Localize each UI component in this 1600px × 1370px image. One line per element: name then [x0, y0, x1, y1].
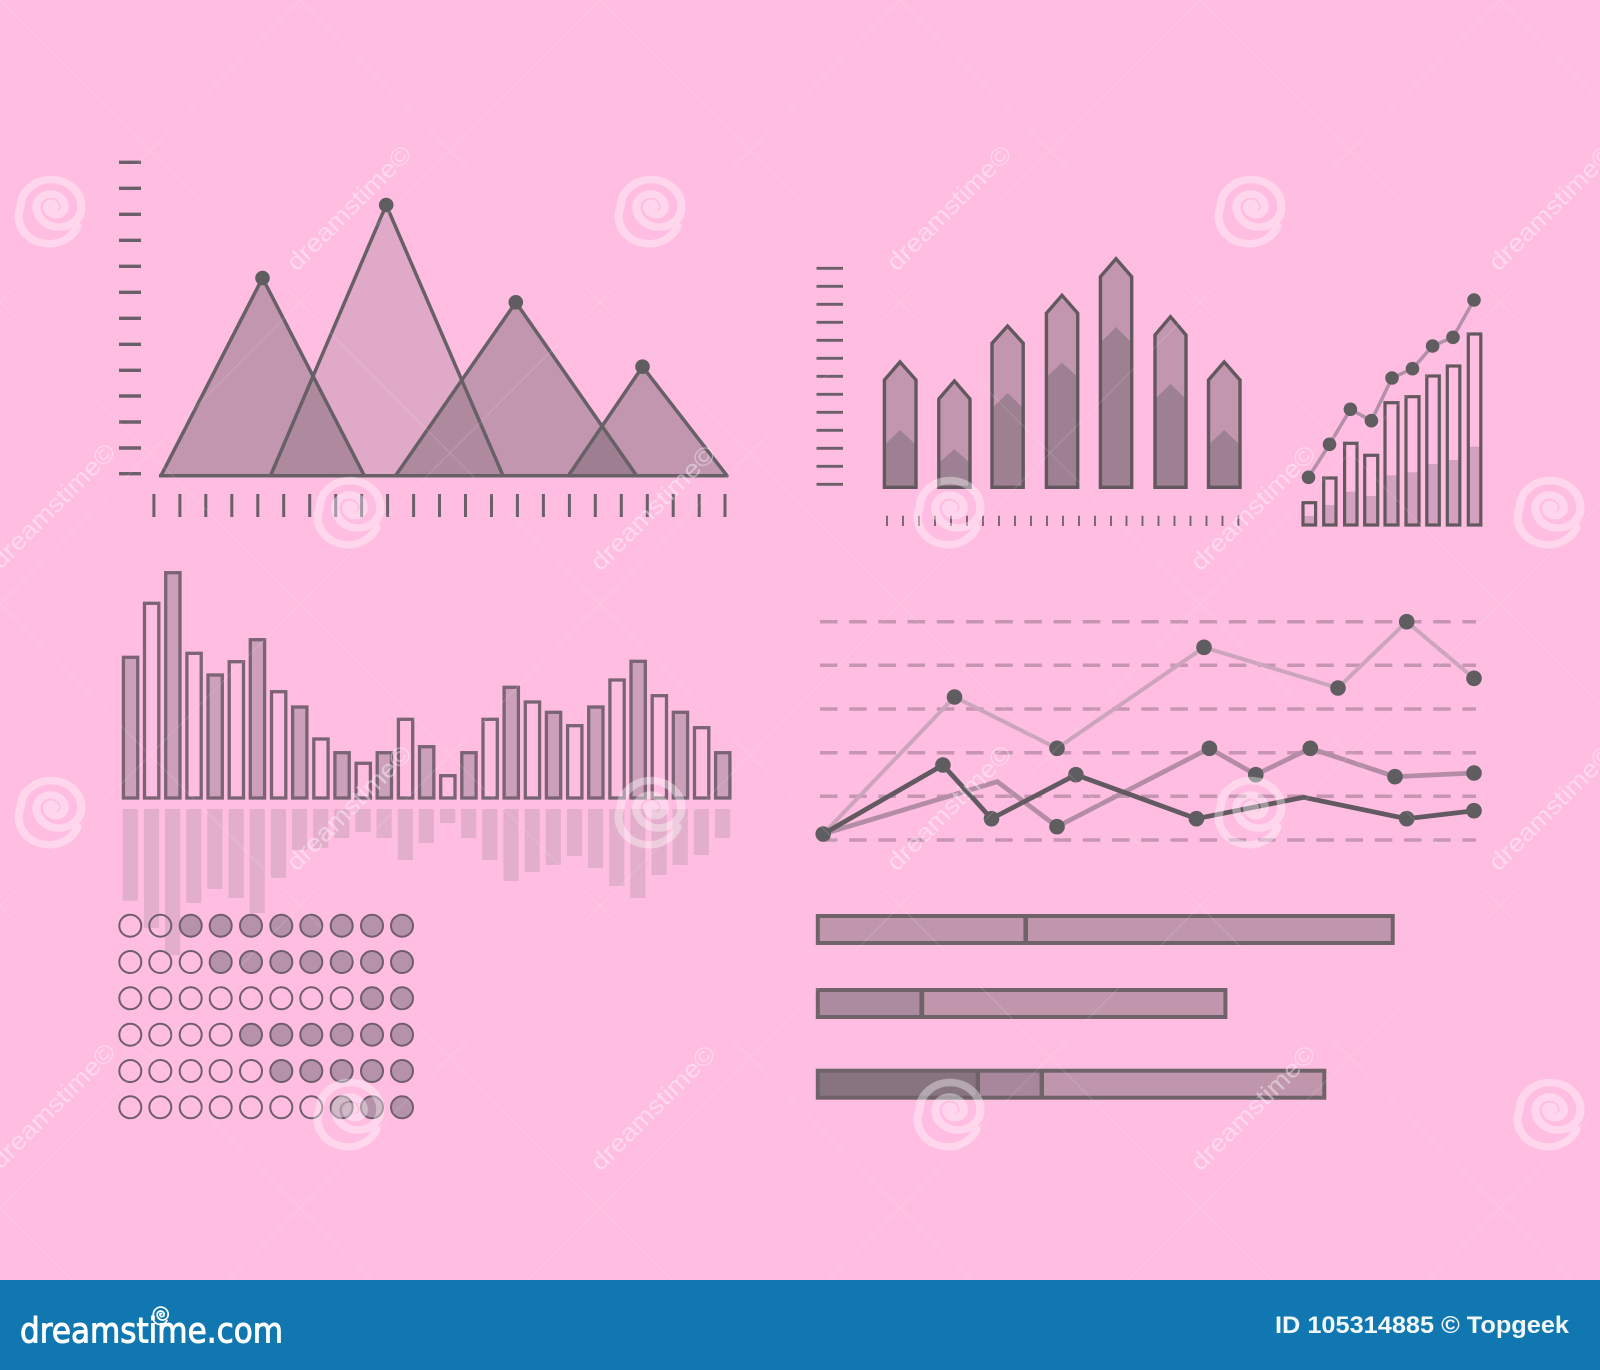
- bar inner fills: [1303, 447, 1481, 525]
- progress bar 2: [816, 988, 1227, 1019]
- footer id and credit: ID 105314885 © Topgeek: [1275, 1312, 1570, 1339]
- medium line: [823, 748, 1474, 834]
- watermark: text: dreamstime©: [1185, 440, 1322, 577]
- panel: multi-line chart: [815, 614, 1482, 842]
- footer logo spiral: [153, 1307, 168, 1325]
- footer logo text: dreamstime.com: [20, 1312, 283, 1352]
- watermark: text: dreamstime©: [281, 740, 418, 877]
- x axis ticks: [154, 494, 725, 517]
- x axis ticks: [887, 516, 1238, 526]
- panel: horizontal progress bars: [816, 914, 1395, 1100]
- panel: dot matrix: [119, 915, 413, 1118]
- y axis ticks: [119, 162, 141, 474]
- watermark: spirals: [19, 179, 1580, 1147]
- watermark: text: dreamstime©: [281, 140, 418, 277]
- triangles: [161, 205, 727, 476]
- watermark: text: dreamstime©: [585, 1040, 722, 1177]
- arrow bar 4: [1046, 295, 1078, 487]
- line dots: [815, 614, 1482, 842]
- footer bar: [0, 1280, 1600, 1370]
- trend line: [1308, 300, 1474, 477]
- panel: arrow bar chart: [816, 259, 1240, 526]
- watermark: text: dreamstime©: [1185, 1040, 1322, 1177]
- arrow bar 3: [992, 326, 1023, 487]
- panel: mountain triangle chart: [119, 162, 728, 517]
- arrow bar 2: [939, 381, 970, 487]
- arrow bar 1: [884, 362, 916, 487]
- panel: bar chart with reflection: [123, 573, 730, 955]
- y axis ticks: [816, 268, 843, 484]
- arrow bar 5: [1100, 259, 1132, 487]
- progress bar 3: [816, 1069, 1326, 1100]
- progress bar 1: [816, 914, 1395, 945]
- bar outlines: [1303, 334, 1481, 525]
- dashed grid lines: [820, 622, 1476, 840]
- peak dots: [255, 198, 650, 374]
- dark line: [823, 765, 1474, 834]
- watermark: text: [0, 140, 1600, 1177]
- panel: small bars with trend line: [1302, 293, 1481, 525]
- reflected bars: [123, 809, 730, 955]
- watermark: text: dreamstime©: [881, 140, 1018, 277]
- arrow bar 6: [1155, 317, 1186, 487]
- trend dots: [1302, 293, 1481, 484]
- arrow bar 7: [1208, 362, 1240, 487]
- baseline: [159, 474, 728, 477]
- light line: [823, 622, 1474, 834]
- watermark: text: dreamstime©: [585, 440, 722, 577]
- main bars: [123, 573, 730, 798]
- watermark: text: dreamstime©: [881, 740, 1018, 877]
